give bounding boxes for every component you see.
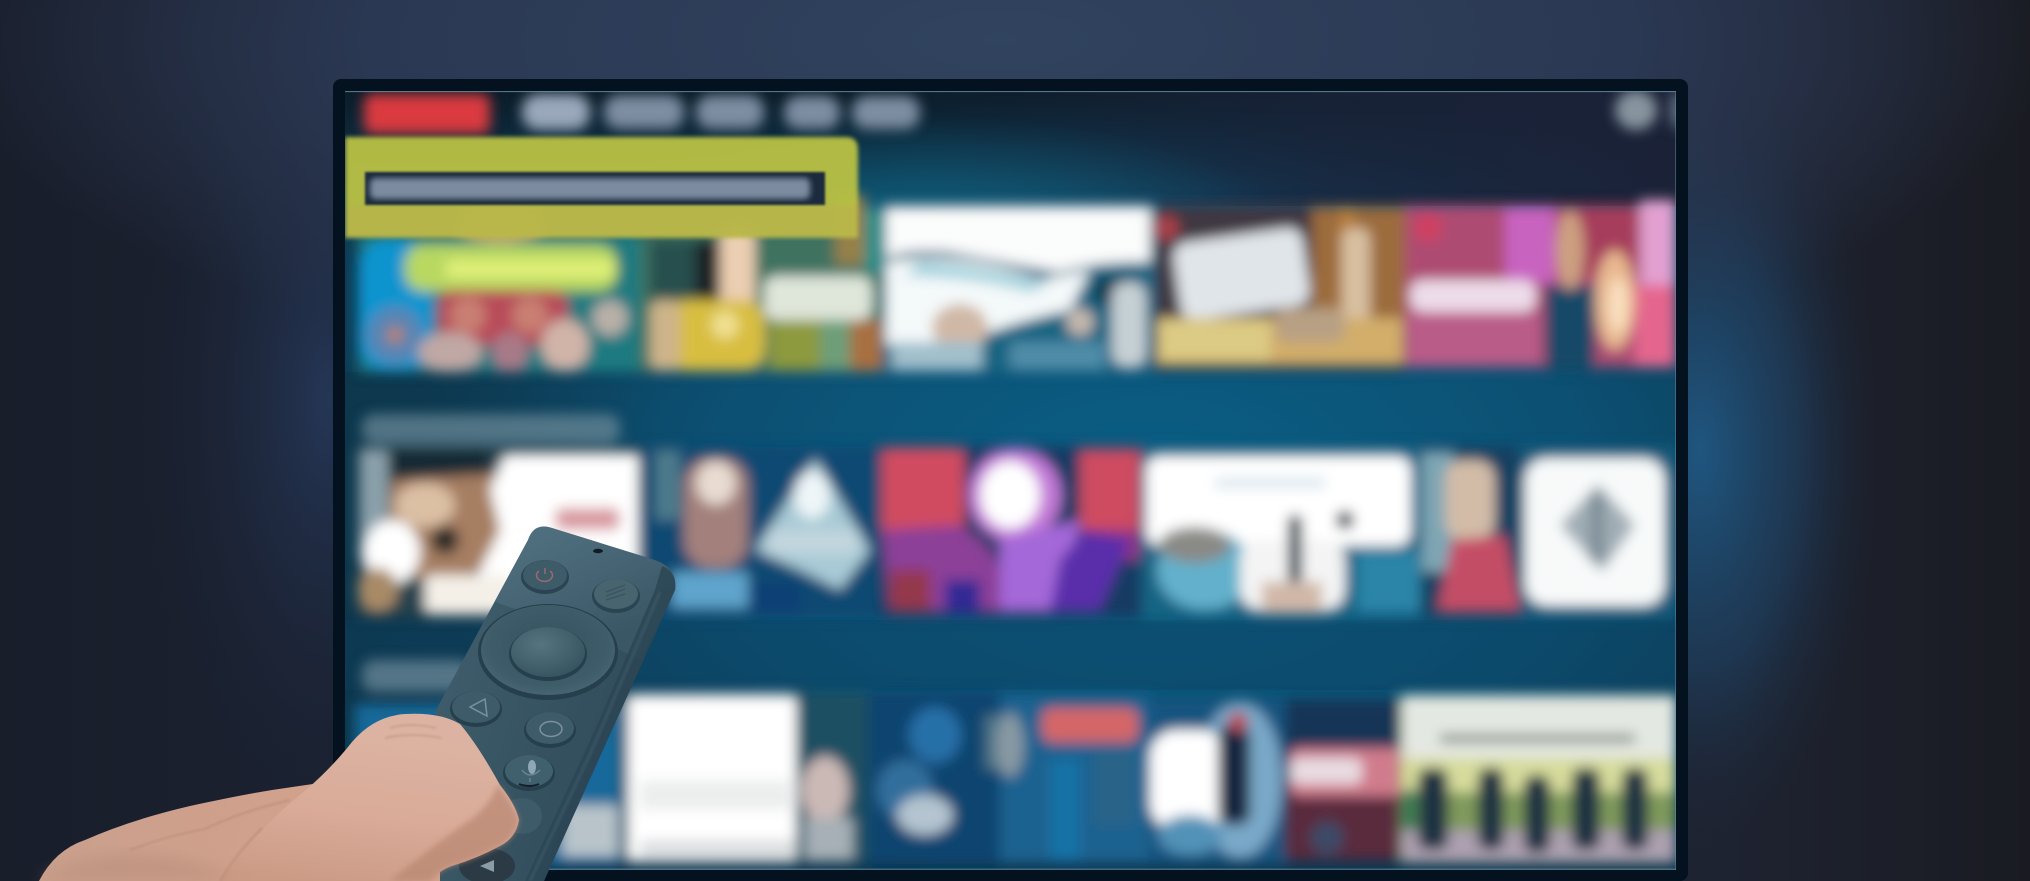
- row 2 thumbnails: [358, 447, 1676, 617]
- highlighted title box: [345, 137, 858, 238]
- dark title bar with blurred text: [365, 172, 825, 205]
- thumbnail 2c: purple poster: [880, 447, 1142, 617]
- thumbnail 2e: woman in red: [1420, 447, 1520, 617]
- profile icon: [1671, 91, 1683, 129]
- thumbnail 3f: maroon title poster: [1285, 700, 1405, 860]
- navigation pills: [522, 94, 920, 130]
- menu button: [592, 579, 640, 613]
- thumbnail 2a: cartoon cat: [358, 447, 640, 617]
- thumbnail 3b: white poster: [620, 692, 868, 864]
- thumbnail 1d: title poster: [1153, 205, 1405, 370]
- row 3 thumbnails: [355, 692, 1676, 865]
- row 3 label: [362, 660, 472, 692]
- tv screen: [345, 90, 1683, 870]
- indicator light: [593, 549, 603, 553]
- thumbnail 2f: white emblem card: [1520, 447, 1676, 617]
- palm and fingers: [39, 780, 440, 881]
- thumbnail 1e: pink poster: [1405, 200, 1676, 370]
- screen edge highlight: [345, 92, 1676, 870]
- lower button: [502, 798, 542, 834]
- tv bezel: [333, 79, 1688, 881]
- thumbnail 2b: man portrait and emblem: [640, 447, 880, 617]
- blurred streaming interface: [355, 90, 1683, 865]
- thumbnail 3d: action poster: [996, 695, 1181, 863]
- volume button: [459, 848, 515, 881]
- thumb: [220, 714, 519, 881]
- home button: [524, 712, 576, 748]
- thumbnail 1c: white panel scene: [882, 203, 1155, 372]
- thumbnail 1b: woman in yellow: [640, 195, 883, 372]
- d-pad centre knob: [509, 627, 587, 681]
- thumbnail 2d: white group scene: [1142, 447, 1420, 617]
- finger creases: [130, 725, 442, 881]
- remote control: [400, 526, 675, 881]
- search icon: [1615, 90, 1657, 130]
- d-pad ring: [478, 604, 618, 700]
- thumbnail 3g: group of five figures: [1400, 695, 1676, 863]
- hand holding remote: [39, 714, 519, 881]
- mic button: [503, 755, 555, 791]
- row 2 label: [362, 414, 620, 444]
- back button: [450, 691, 502, 727]
- screen background: [345, 91, 1676, 870]
- logo: red brand mark: [364, 94, 490, 134]
- remote top highlight: [490, 526, 675, 660]
- power button: [521, 560, 569, 594]
- palm lower shadow: [39, 854, 240, 881]
- remote side edge: [525, 566, 675, 881]
- thumbnail 1a: cartoon: [358, 202, 640, 372]
- thumbnail 3a: blue panel behind thumb: [355, 704, 620, 865]
- row 1 thumbnails: [358, 195, 1676, 372]
- thumbnail 3e: white figure: [1148, 700, 1288, 864]
- remote body: [400, 526, 675, 881]
- thumb shading: [390, 785, 519, 881]
- thumbnail 3c: blue group scene: [868, 692, 1005, 864]
